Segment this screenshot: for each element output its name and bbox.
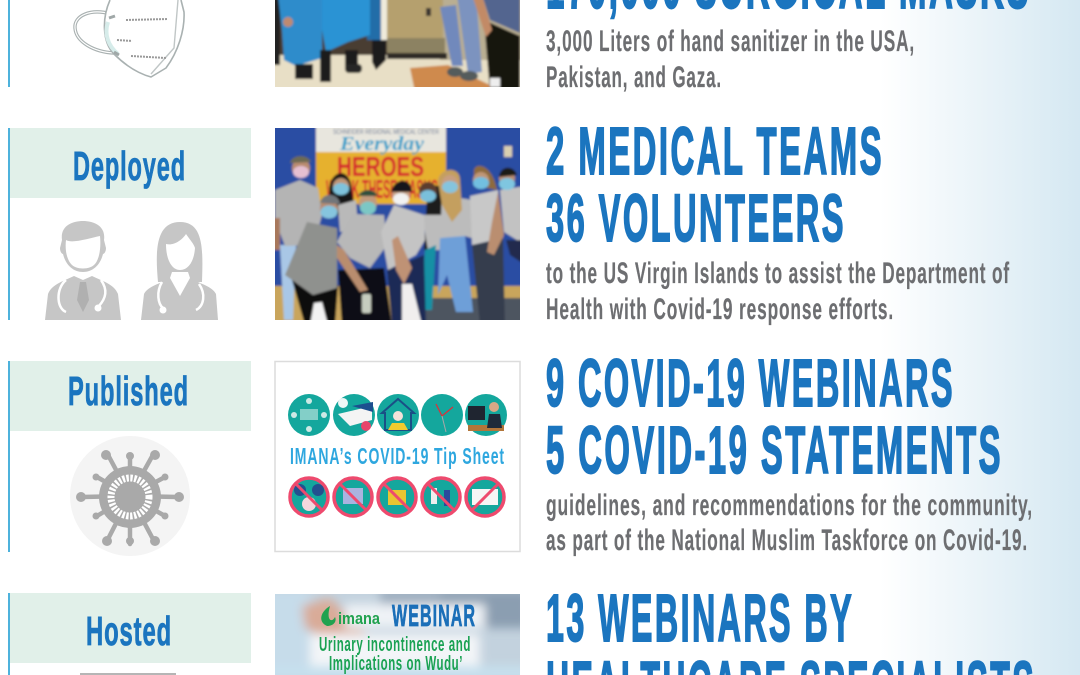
icon: coronavirus bbox=[70, 436, 190, 556]
panel: Published row bbox=[8, 361, 251, 552]
photo: medical team in the US Virgin Islands: SCHNEIDER REGIONAL MEDICAL CENTER bbox=[333, 129, 439, 136]
label: Deployed: Deployed bbox=[73, 143, 186, 189]
text block: medical teams bbox=[546, 114, 1010, 326]
photo: medical team in the US Virgin Islands: Everyday bbox=[339, 133, 424, 155]
text block: masks and sanitizer: Pakistan, and Gaza. bbox=[546, 61, 722, 94]
text block: webinars and statements bbox=[546, 346, 1033, 557]
webinar title: WEBINAR bbox=[392, 598, 476, 633]
photo: volunteers in blue gowns bbox=[270, 0, 525, 92]
photo: medical team in the US Virgin Islands bbox=[270, 123, 525, 326]
panel: IMANA's COVID-19 Tip Sheet bbox=[275, 362, 520, 552]
text block: masks and sanitizer bbox=[546, 0, 1031, 94]
panel: IMANA webinar banner: Implications on Wudu’ bbox=[329, 653, 463, 675]
photo: medical team in the US Virgin Islands: HEROES bbox=[337, 151, 424, 182]
people bbox=[280, 245, 296, 320]
panel: IMANA webinar banner bbox=[275, 594, 520, 675]
background gradient panel bbox=[880, 0, 1080, 675]
panel: Deployed row bbox=[8, 128, 251, 320]
icons: avoid these bbox=[290, 478, 504, 516]
webinar logo: imana bbox=[338, 609, 380, 628]
icon: KN95 mask bbox=[75, 0, 184, 77]
icon: female doctor bbox=[141, 222, 218, 320]
webinar subject: Urinary incontinence and bbox=[319, 634, 471, 656]
label: Published: Published bbox=[68, 368, 189, 414]
panel: Hosted row bbox=[8, 593, 251, 675]
icons: do these at home bbox=[288, 394, 507, 436]
tip sheet title: IMANA’s COVID-19 Tip Sheet bbox=[290, 443, 505, 469]
photo: medical team in the US Virgin Islands: WORK THESE MASKS bbox=[326, 174, 438, 204]
label: Hosted: Hosted bbox=[86, 608, 172, 654]
panel: masks row label bbox=[8, 0, 184, 87]
icon: male doctor bbox=[45, 221, 121, 320]
